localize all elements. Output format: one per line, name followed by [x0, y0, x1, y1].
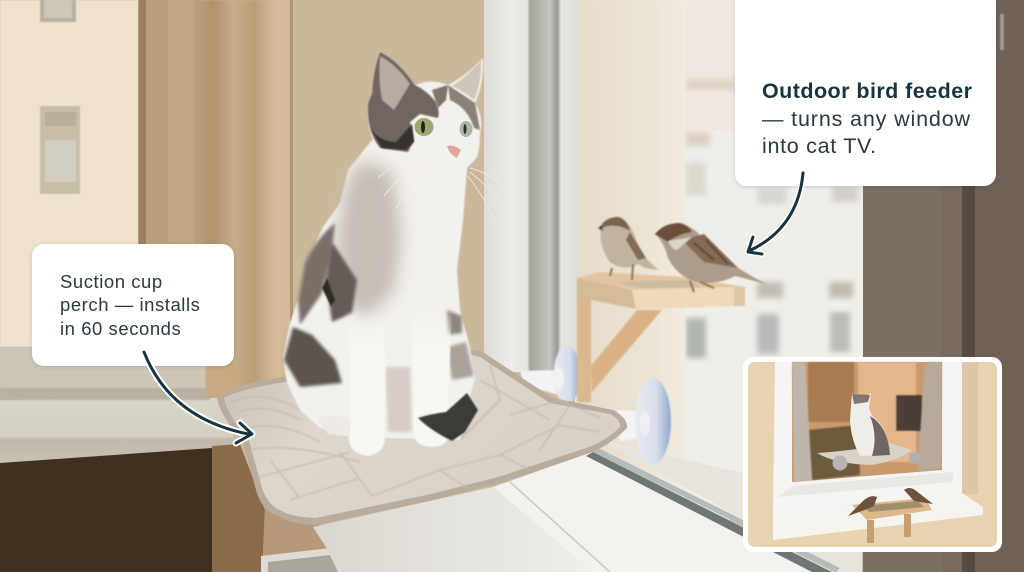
- rear patch: [284, 327, 342, 387]
- callout text: outdoor bird feeder: [762, 79, 973, 158]
- inset feeder: [852, 498, 932, 520]
- callout text: outdoor bird feeder: Outdoor bird feeder: [762, 79, 973, 103]
- inset photo: cat seen from outside: [743, 357, 1002, 552]
- callout: outdoor bird feeder: [735, 0, 996, 186]
- bird feeder: [577, 272, 745, 402]
- outdoor view and window: [313, 0, 1024, 572]
- wood lower wall: [212, 444, 345, 572]
- chest tabby shading: [336, 160, 402, 320]
- pale column: [577, 0, 685, 510]
- tabby head patch: [368, 52, 439, 152]
- left sill: [0, 396, 235, 463]
- under-sill dark wall: [0, 448, 212, 572]
- front legs: [346, 310, 385, 456]
- window face: [493, 452, 834, 572]
- tail: [418, 393, 478, 441]
- callout text: outdoor bird feeder: into cat TV.: [762, 134, 877, 158]
- inset cat: [850, 393, 890, 456]
- radiator: [261, 548, 342, 572]
- right head patch: [448, 85, 480, 130]
- head: [368, 52, 483, 174]
- sparrow left: [598, 217, 658, 280]
- rear paw: [317, 416, 350, 436]
- suction cup: rear: [520, 346, 580, 404]
- arrow: to bird feeder: [748, 173, 803, 254]
- belly: [385, 367, 412, 432]
- nose: [447, 146, 461, 158]
- inset perch: [817, 443, 912, 465]
- wall: [293, 0, 486, 372]
- callout text: suction cup perch: in 60 seconds: [60, 318, 181, 339]
- right hip: [447, 342, 474, 380]
- callout: suction cup perch: [32, 244, 234, 366]
- curtain: [198, 0, 292, 420]
- inset lower frame: [778, 472, 953, 497]
- arrow: to perch: [144, 352, 252, 443]
- inner window sill: [313, 487, 592, 572]
- suction cup: front: [618, 378, 671, 464]
- ears inner: [379, 56, 410, 110]
- glass strip: [586, 452, 832, 572]
- inset sill: [773, 493, 983, 540]
- callout text: suction cup perch: Suction cup: [60, 271, 163, 292]
- inset window frame: [773, 362, 962, 513]
- wooden window frame: [138, 0, 200, 400]
- inset glass: [792, 362, 942, 482]
- window lower frame: [0, 342, 206, 347]
- callout text: suction cup perch: perch — installs: [60, 294, 200, 315]
- inset birds: [848, 496, 877, 516]
- left window view: [0, 0, 142, 345]
- callout text: suction cup perch: [60, 271, 200, 339]
- eyes: [414, 118, 434, 136]
- sparrow right: [655, 223, 768, 292]
- pale outside ledge: [600, 440, 862, 572]
- cat perch cushion: [217, 350, 627, 525]
- right dark frame: [863, 0, 963, 572]
- flank stripes: [298, 223, 335, 325]
- body: [283, 140, 475, 440]
- buildings: [575, 0, 875, 520]
- whiskers: [378, 156, 504, 218]
- cat: [283, 52, 504, 456]
- inset wall: [748, 362, 997, 547]
- white window frame: [484, 0, 578, 372]
- callout text: outdoor bird feeder: — turns any window: [762, 107, 971, 131]
